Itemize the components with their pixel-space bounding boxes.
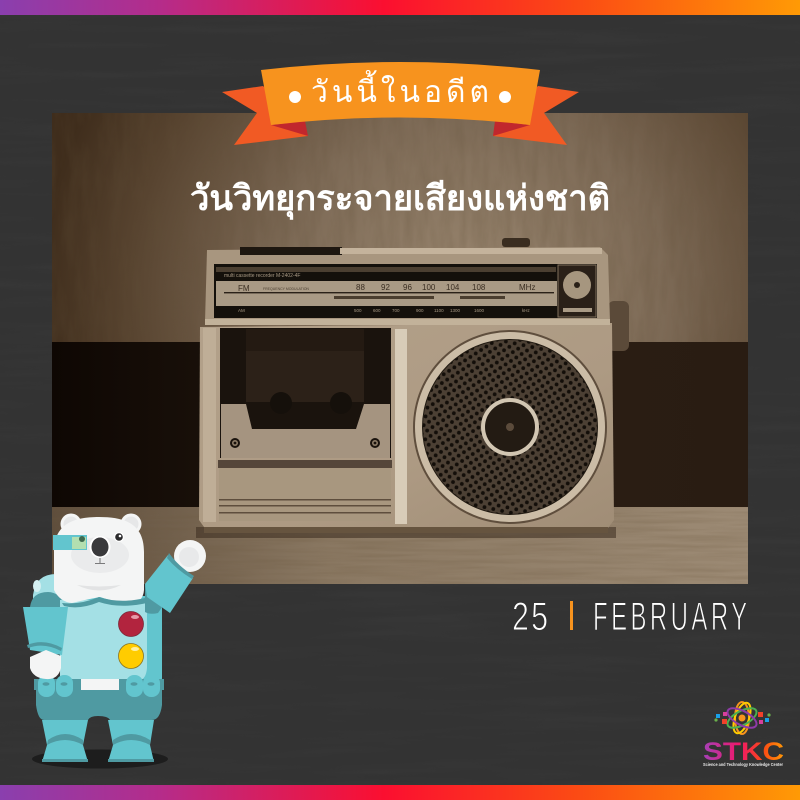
logo wordmark: STKC — [703, 738, 784, 766]
photo wall — [52, 113, 748, 343]
tuner panel: 96 — [403, 283, 412, 292]
tuner panel: 700 — [392, 308, 400, 313]
tuner panel: multi cassette recorder M-2402-4F — [224, 273, 300, 279]
main title: วันวิทยุกระจายเสียงแห่งชาติ — [190, 179, 610, 220]
cassette door — [220, 328, 391, 458]
ribbon folds — [271, 121, 308, 136]
mascot head — [54, 514, 147, 607]
ribbon left tail — [222, 86, 308, 145]
mascot lowered arm — [23, 607, 68, 679]
bottom gradient bar — [0, 785, 800, 800]
center trim strip — [395, 329, 407, 524]
tuner panel: 900 — [416, 308, 424, 313]
tuner panel: 1300 — [450, 308, 461, 313]
tuner panel: 108 — [472, 283, 486, 292]
tuner panel: FM — [238, 284, 250, 293]
ribbon left dot — [289, 91, 301, 103]
radio handle knobs — [502, 238, 530, 247]
top gradient bar — [0, 0, 800, 15]
left trim strip — [203, 328, 216, 522]
tuner panel: 500 — [354, 308, 362, 313]
mascot shadow — [32, 750, 168, 768]
tuner panel: 88 — [356, 283, 365, 292]
mascot: polar bear robot — [23, 514, 206, 768]
tuner panel: 1100 — [434, 308, 444, 313]
tuner panel: 104 — [446, 283, 460, 292]
photo: vintage cassette radio — [52, 113, 748, 584]
mascot torso — [30, 574, 162, 686]
mascot yellow button — [118, 644, 144, 668]
mascot red button — [118, 612, 144, 636]
tuner panel: 92 — [381, 283, 390, 292]
ribbon banner — [222, 62, 579, 145]
ribbon right tail — [493, 86, 579, 145]
radio lower body — [199, 323, 614, 528]
tuner panel: FREQUENCY MODULATION — [263, 287, 309, 291]
tuner panel: AM — [238, 308, 245, 313]
lower cover panel — [218, 460, 392, 514]
tuner panel: 1600 — [474, 308, 485, 313]
tuner panel: 100 — [422, 283, 436, 292]
speaker — [413, 330, 607, 524]
STKC logo — [703, 701, 784, 767]
photo dark wainscot band — [52, 342, 748, 508]
microphone badge — [558, 265, 596, 317]
date separator — [570, 601, 573, 630]
date month: FEBRUARY — [593, 594, 751, 638]
tuner panel: kHz — [522, 308, 530, 313]
ribbon right dot — [499, 91, 511, 103]
mascot legs — [42, 720, 154, 762]
radio top body — [205, 247, 610, 322]
photo table top — [52, 507, 748, 584]
mascot trousers — [36, 690, 162, 720]
mascot eyepiece — [53, 535, 87, 550]
tuner panel: MHz — [519, 283, 535, 292]
mascot raised arm — [145, 540, 206, 614]
logo atom icon — [714, 701, 771, 735]
tuner panel — [214, 264, 597, 318]
ribbon title: วันนี้ในอดีต — [311, 70, 489, 109]
tuner panel: 600 — [373, 308, 381, 313]
date — [512, 594, 751, 639]
logo tagline: Science and Technology Knowledge Center — [703, 762, 783, 767]
ribbon body — [261, 62, 540, 125]
date day: 25 — [512, 594, 550, 639]
radio — [199, 238, 629, 533]
mascot belt — [34, 675, 164, 700]
